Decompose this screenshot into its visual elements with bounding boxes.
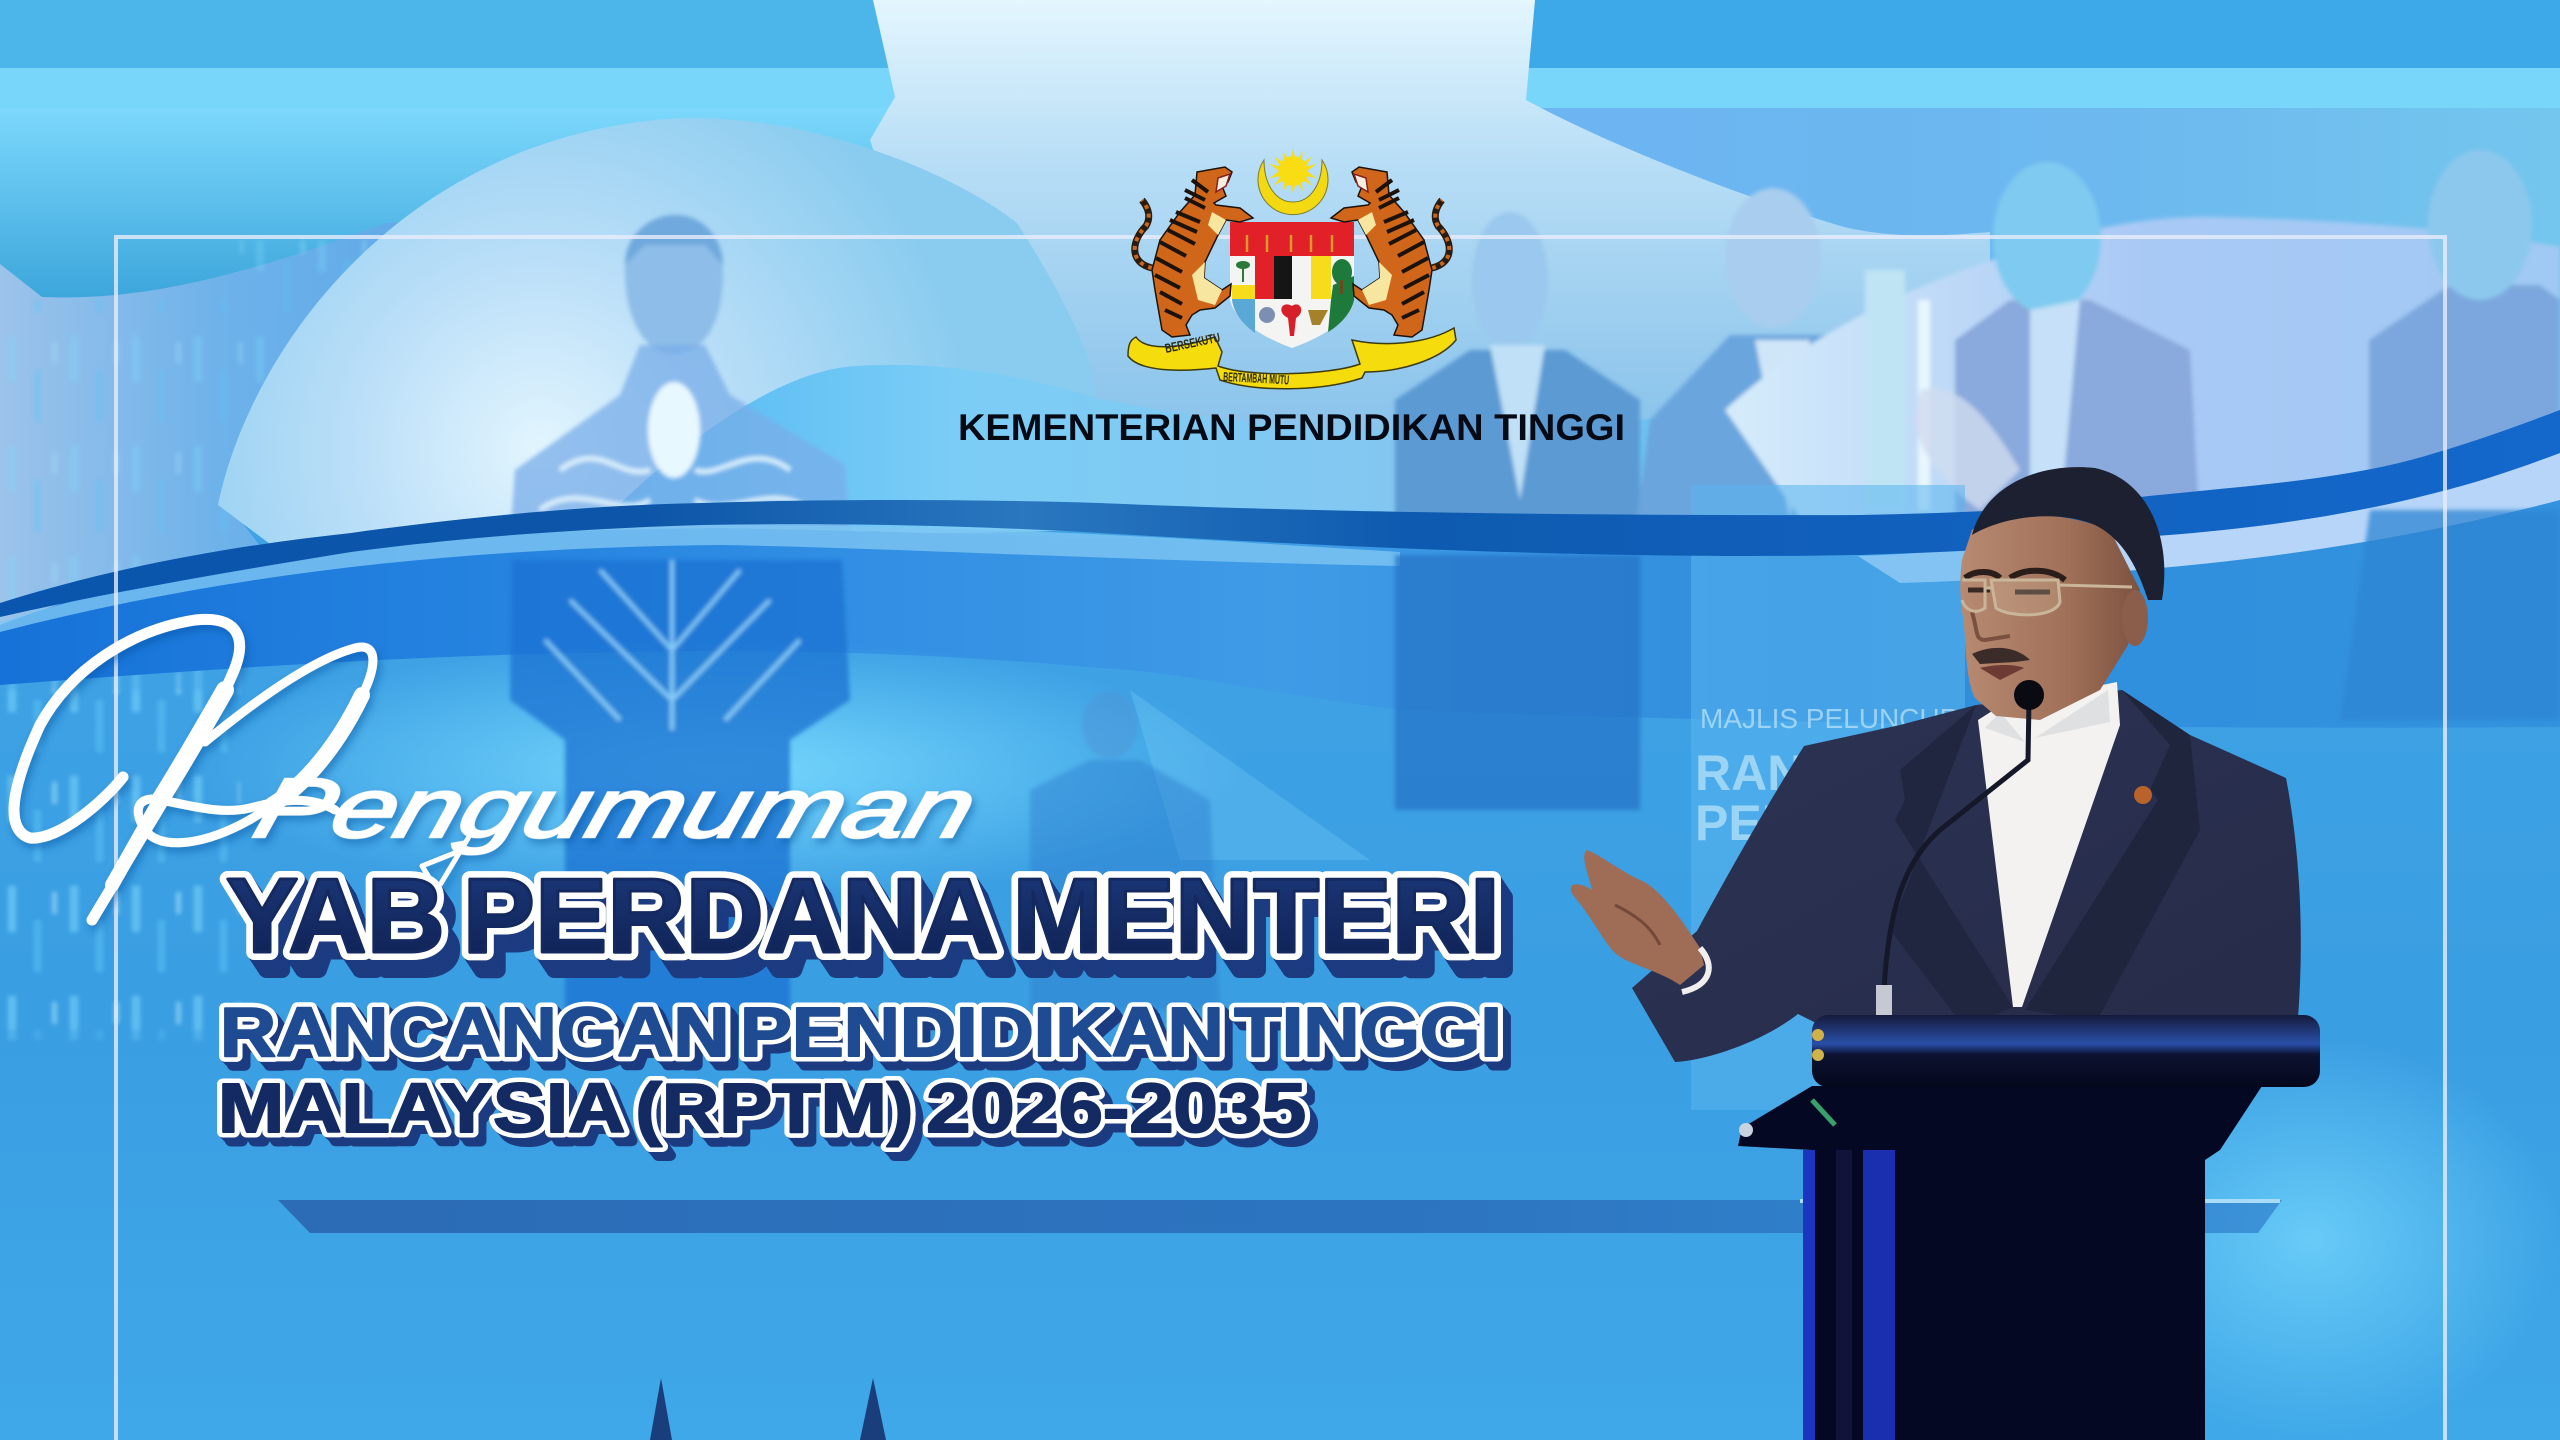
shield <box>1230 222 1354 348</box>
pale band under wave left <box>0 525 1400 632</box>
glow below wave <box>200 640 2560 1440</box>
central pale shape <box>870 0 1990 530</box>
ghost screen panel <box>1691 485 1999 1110</box>
ghost screen panel: RANC <box>1695 745 1839 801</box>
title line 2: RANCANGAN PENDIDIKAN TINGGI <box>220 993 1502 1071</box>
cyan wedge beneath the emblem <box>582 365 1830 541</box>
title line 1: YAB PERDANA MENTERI <box>226 857 1500 975</box>
decorative frame <box>116 237 2445 1440</box>
sun <box>1269 149 1317 193</box>
scroll <box>1128 328 1456 389</box>
ghost figure: central speaker upper <box>510 215 850 540</box>
ghost figure: distant man on stage <box>1030 691 1220 1010</box>
right tiger <box>1331 167 1449 337</box>
title line 1: YAB PERDANA MENTERI <box>226 857 1500 975</box>
speaker: suit, shirt, head and hand <box>1571 467 2301 1062</box>
podium <box>1738 1015 2320 1440</box>
ghost figure: stage dignitaries lower <box>1395 510 2560 810</box>
pale band under wave right <box>1858 453 2560 583</box>
coat of arms emblem <box>1128 149 1456 389</box>
panel: digital rain left <box>0 220 430 1030</box>
scroll: BERSEKUTU <box>1164 330 1221 356</box>
pale circle backdrop <box>218 118 1095 568</box>
shadow bar under title <box>278 1199 2282 1233</box>
scroll: BERTAMBAH MUTU <box>1223 369 1290 387</box>
title line 3: MALAYSIA (RPTM) 2026-2035 <box>218 1069 1306 1147</box>
crescent <box>1258 160 1328 215</box>
ghost screen panel: PEN <box>1695 795 1798 851</box>
script heading: Pengumuman <box>14 619 987 920</box>
microphone <box>1876 680 2044 1017</box>
script heading: Pengumuman: Pengumuman <box>245 762 987 856</box>
wave underside band <box>0 460 2560 728</box>
ghost figure: central speaker lower <box>510 560 850 1040</box>
digital rain below wave <box>0 690 240 1040</box>
bottom spires <box>650 1378 886 1440</box>
title line 3: MALAYSIA (RPTM) 2026-2035 <box>218 1069 1306 1147</box>
title line 2: RANCANGAN PENDIDIKAN TINGGI <box>220 993 1502 1071</box>
wave ribbon <box>0 410 2560 617</box>
ministry name: KEMENTERIAN PENDIDIKAN TINGGI <box>958 407 1625 448</box>
ghost screen panel: MAJLIS PELUNCURAN <box>1700 703 1999 734</box>
left tiger <box>1135 167 1253 337</box>
ghost figures: dignitaries on stage <box>1395 150 2560 531</box>
